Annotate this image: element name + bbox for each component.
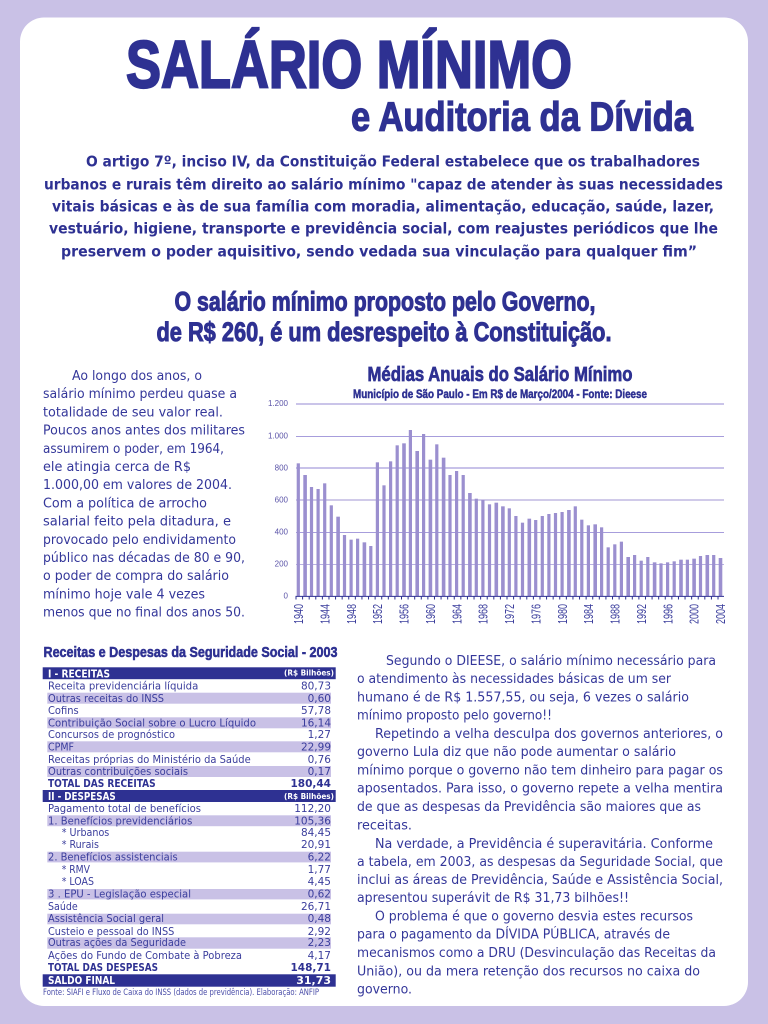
y axis labels: 1.200 [268,399,289,408]
table row: final balance: SALDO FINAL [48,974,115,987]
x axis year labels: 1956 [396,604,412,624]
text block: left column history: salário mínimo perdeu quase a [43,387,237,402]
text block: left column history: menos que no final dos anos 50. [43,606,245,621]
y axis labels [268,399,289,600]
x axis year labels [291,604,728,624]
table rows: revenue: Contribuição Social sobre o Lucro Líquido [48,716,256,729]
chart subtitle: Município de São Paulo - Em R$ de Março/2004 - Fonte: Dieese [353,389,647,401]
text block: right column argument: receitas. [357,818,412,834]
x axis year labels: 1968 [476,604,491,624]
table rows: expenses: 105,36 [294,816,331,828]
text block: right column argument: de que as despesas da Previdência são maiores que as [357,800,701,815]
table rows: expenses: Ações do Fundo de Combate à Pobreza [48,949,242,962]
table rows: revenue: 0,76 [308,754,331,766]
table header: expenses [43,790,336,803]
y axis labels: 600 [275,496,289,504]
text block: left column history: Com a política de arrocho [43,496,207,511]
table row: final balance [43,974,336,987]
table rows: expenses: Custeio e pessoal do INSS [48,925,174,938]
x axis year labels: 1960 [423,604,438,624]
x axis year labels: 1976 [528,604,543,624]
x axis year labels: 1988 [608,604,622,624]
table rows: expenses: 2,92 [308,926,331,938]
table rows: expenses: 0,48 [308,913,331,925]
table header: revenue: (R$ Bilhões) [284,668,334,678]
x axis year labels: 2000 [687,604,702,624]
table rows: expenses: * Rurais [62,838,99,851]
text block: left column history: ele atingia cerca de R$ [43,460,191,475]
table rows: revenue: 1,27 [308,729,331,741]
table rows: revenue: 22,99 [301,741,331,753]
text block: left column history: mínimo hoje vale 4 vezes [43,587,205,602]
chart title: Médias Anuais do Salário Mínimo [368,364,632,386]
table source note: Fonte: SIAFI e Fluxo de Caixa do INSS (dados de previdência). Elaboração: ANFIP [43,987,319,998]
table rows: expenses: * Urbanos [62,826,110,839]
table rows: revenue: 16,14 [301,717,331,729]
text block: right column argument: mínimo porque o governo não tem dinheiro para pagar os [357,764,723,778]
table rows: expenses: Pagamento total de benefícios [48,802,201,815]
y axis labels: 1.000 [268,432,289,440]
x axis year labels: 1972 [502,604,517,624]
y axis labels: 800 [275,464,289,472]
text block: right column argument: governo Lula diz que não pode aumentar o salário [357,745,676,760]
text block: left column history: assumirem o poder, em 1964, [43,442,224,457]
table rows: expenses: 4,45 [308,876,331,888]
table rows: expenses: Outras ações da Seguridade [48,936,186,949]
bars 1940 to 2004 [297,430,722,596]
text block: constitutional quote: vitais básicas e às de sua família com moradia, alimentação, educação, saúde, lazer, [52,198,714,216]
text block: right column argument: inclui as áreas de Previdência, Saúde e Assistência Social, [357,873,723,888]
table rows: expenses: 26,71 [301,901,331,913]
x axis year labels: 1964 [449,604,464,624]
table rows: expenses: Saúde [48,900,78,913]
table rows: expenses: 0,62 [308,889,331,901]
table rows: expenses: 3 . EPU - Legislação especial [48,888,191,901]
text block: right column argument: aposentados. Para isso, o governo repete a velha mentira [357,782,723,796]
table header: revenue: I - RECEITAS [48,668,110,680]
y axis labels: 0 [284,592,289,600]
table rows: expenses: 2,23 [308,937,331,949]
text block: left column history: o poder de compra do salário [43,569,229,584]
text block: right column argument: para o pagamento da DÍVIDA PÚBLICA, através de [357,926,670,942]
text block: left column history: totalidade de seu valor real. [43,405,223,420]
table row: final balance: 31,73 [296,974,331,987]
text block: right column argument: a tabela, em 2003, as despesas da Seguridade Social, que [357,855,723,870]
table rows: expenses: 4,17 [308,950,331,962]
heading: minimum wage statement: de R$ 260, é um desrespeito à Constituição. [156,317,612,347]
table rows: revenue [47,679,331,790]
table rows: expenses: 20,91 [301,839,331,851]
title: SALÁRIO MÍNIMO [126,28,572,102]
text block: left column history [43,369,245,621]
table rows: revenue: Receita previdenciária líquida [48,679,198,692]
text block: right column argument: mecanismos como a DRU (Desvinculação das Receitas da [357,946,716,961]
table rows: revenue: 80,73 [301,680,331,692]
text block: left column history: provocado pelo endividamento [43,533,236,548]
text block: constitutional quote: O artigo 7º, inciso IV, da Constituição Federal estabelece que os trabalhadores [86,152,700,170]
text block: constitutional quote [44,152,723,260]
table rows: revenue: Cofins [48,704,79,717]
table rows: expenses: 2. Benefícios assistenciais [48,850,178,863]
x axis year labels: 1992 [634,604,649,624]
text block: right column argument: Segundo o DIEESE, o salário mínimo necessário para [386,654,716,669]
y axis labels: 400 [275,528,289,536]
table rows: revenue: TOTAL DAS RECEITAS [48,777,156,790]
text block: right column argument [357,654,723,998]
x axis year labels: 1944 [317,604,332,624]
table rows: expenses: 1,77 [308,864,331,876]
table rows: expenses: 148,71 [290,962,331,974]
table rows: expenses: Assistência Social geral [48,912,164,925]
text block: right column argument: o atendimento às necessidades básicas de um ser [357,672,672,687]
x axis year labels: 1996 [660,604,675,624]
table rows: expenses: 6,22 [308,851,331,863]
table rows: revenue: Outras receitas do INSS [48,692,164,705]
text block: left column history: Poucos anos antes dos militares [43,424,245,439]
table title: Receitas e Despesas da Seguridade Social - 2003 [44,644,338,661]
x axis year labels: 1948 [344,604,359,624]
table rows: expenses: 84,45 [301,827,331,839]
x axis year labels: 1952 [370,604,385,624]
heading: minimum wage statement: O salário mínimo proposto pelo Governo, [174,286,596,316]
x axis year labels: 1940 [291,604,306,624]
text block: right column argument: mínimo proposto pelo governo!! [357,708,552,724]
table rows: expenses: * LOAS [62,875,94,888]
table rows: expenses: * RMV [62,863,90,876]
subtitle: e Auditoria da Dívida [351,94,694,140]
table rows: revenue: 0,17 [308,766,331,778]
table rows: expenses: TOTAL DAS DESPESAS [48,961,158,974]
table header: expenses: II - DESPESAS [48,790,116,803]
table rows: expenses [47,802,331,974]
x axis year labels: 1984 [581,604,596,624]
table rows: revenue: Outras contribuições sociais [48,765,188,778]
table rows: revenue: 57,78 [301,705,331,717]
text block: right column argument: União), ou da mera retenção dos recursos no caixa do [357,964,700,980]
text block: right column argument: Na verdade, a Previdência é superavitária. Conforme [375,837,713,852]
text block: constitutional quote: preservem o poder aquisitivo, sendo vedada sua vinculação para qualquer fim” [61,242,697,260]
text block: left column history: salarial feito pela ditadura, e [43,515,231,530]
heading: minimum wage statement [156,286,612,347]
text block: right column argument: governo. [357,982,412,998]
text block: right column argument: O problema é que o governo desvia estes recursos [375,910,693,924]
table rows: revenue: CPMF [48,740,74,753]
x axis year labels: 2004 [713,604,728,624]
text block: constitutional quote: urbanos e rurais têm direito ao salário mínimo "capaz de atender às suas necessidades [44,176,723,194]
table header: revenue [43,667,336,680]
table rows: revenue: Concursos de prognóstico [48,728,175,741]
text block: right column argument: apresentou superávit de R$ 31,73 bilhões!! [357,891,629,906]
table header: expenses: (R$ Bilhões) [284,792,334,801]
text block: left column history: público nas décadas de 80 e 90, [43,551,245,566]
text block: constitutional quote: vestuário, higiene, transporte e previdência social, com reajustes periódicos que lhe [49,220,718,238]
text block: right column argument: humano é de R$ 1.557,55, ou seja, 6 vezes o salário [357,690,689,706]
text block: right column argument: Repetindo a velha desculpa dos governos anteriores, o [375,727,723,742]
chart: annual averages of the minimum wage [268,364,728,624]
y axis labels: 200 [275,560,289,568]
table rows: expenses: 1. Benefícios previdenciários [48,815,193,828]
text block: left column history: 1.000,00 em valores de 2004. [43,478,232,493]
table rows: revenue: 180,44 [290,778,331,790]
table: social security revenue and expenses [43,644,337,998]
table rows: revenue: 0,60 [308,693,331,705]
x axis year labels: 1980 [555,604,570,624]
table rows: revenue: Receitas próprias do Ministério da Saúde [48,753,251,766]
table rows: expenses: 112,20 [294,803,331,815]
text block: left column history: Ao longo dos anos, o [72,369,202,384]
